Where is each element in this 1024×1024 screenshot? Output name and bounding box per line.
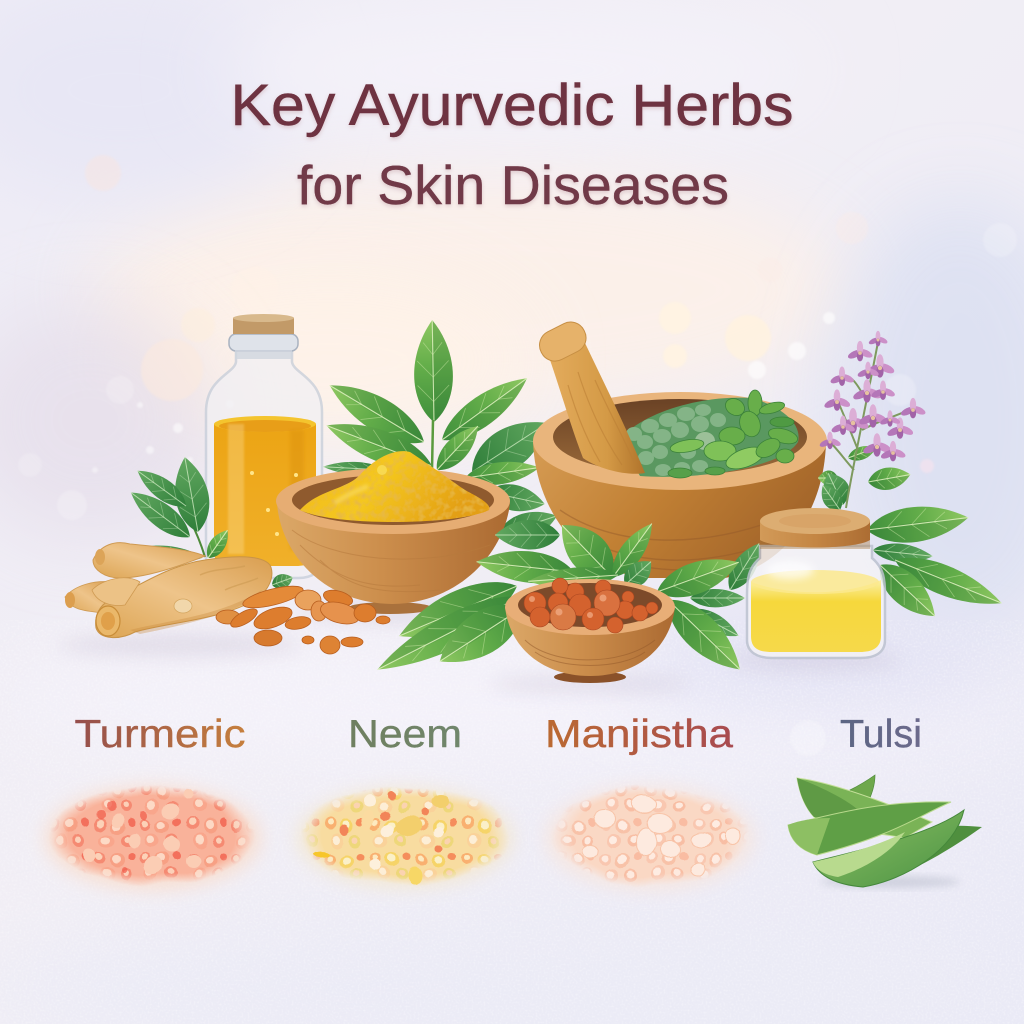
glass bottle with turmeric oil [206,314,322,578]
left sprig leaves [124,454,234,563]
label: Tulsi: Tulsi [840,713,922,756]
manjistha skin powder pile [546,786,754,890]
title: Key Ayurvedic Herbs [230,75,794,140]
label: Neem: Neem [348,713,462,756]
label: Manjistha: Manjistha [545,713,733,756]
turmeric skin powder pile [45,786,261,890]
tulsi leaf cluster [788,775,982,888]
leaves around the jar [721,500,1007,628]
title: Key Ayurvedic Herbs [230,73,794,138]
turmeric roots [65,543,295,638]
title: for Skin Diseases [297,154,729,216]
label: Turmeric: Turmeric [74,713,246,756]
neem leaves behind turmeric bowl [321,320,561,547]
small bowl with red manjistha nuts [505,578,675,683]
neem skin powder pile [297,786,513,888]
turmeric chips [216,582,390,654]
title [230,73,794,218]
bokeh lights [18,155,1017,756]
turmeric wood bowl with powder [276,451,510,614]
title: for Skin Diseases [297,156,729,218]
ground shadows [60,603,900,692]
glass jar of yellow ghee [747,508,885,658]
mortar with green herbs [533,317,827,578]
flowering tulsi sprig [815,331,927,515]
central foreground leaves [370,512,752,684]
